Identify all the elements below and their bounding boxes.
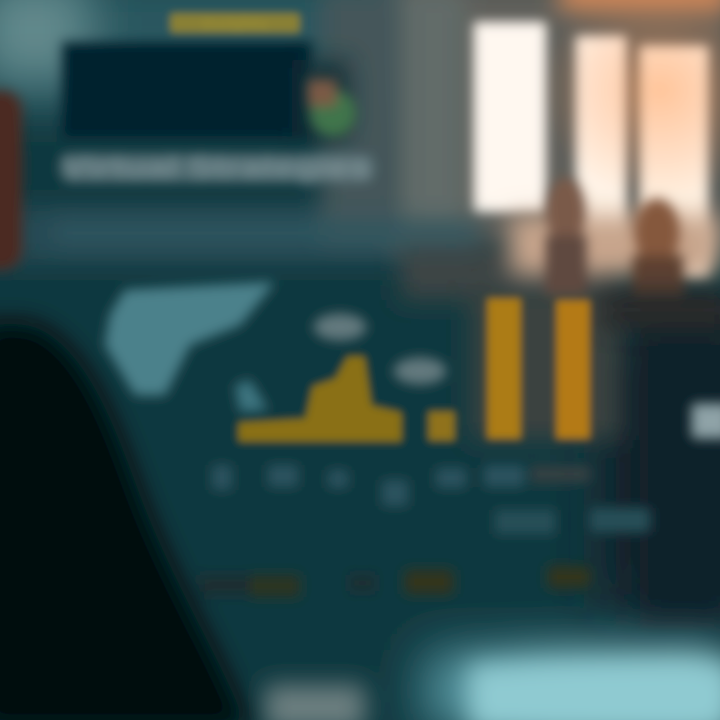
black foreground silhouette xyxy=(0,322,250,720)
secondary labels xyxy=(495,508,650,534)
area bars xyxy=(238,356,402,442)
subtitle band xyxy=(50,222,480,244)
chart value labels xyxy=(314,314,446,384)
amber bar chart xyxy=(238,298,590,442)
bright windows xyxy=(474,0,720,276)
heading: Virtual Strategies xyxy=(62,151,370,184)
bottom cyan glow xyxy=(265,650,720,720)
axis labels xyxy=(212,465,590,506)
reddish figure at left edge xyxy=(0,90,22,270)
tall bar two xyxy=(556,300,590,439)
world map xyxy=(105,282,275,412)
dark ledge below the windows xyxy=(600,290,720,330)
white desk highlight xyxy=(692,404,720,438)
amber title bar: Insights xyxy=(202,14,268,33)
dark header panel xyxy=(62,42,312,138)
silhouettes of people at the window xyxy=(545,178,684,300)
tall bar one xyxy=(487,298,521,439)
amber title bar xyxy=(170,13,300,33)
bottom legend xyxy=(200,566,590,597)
logo icon xyxy=(308,80,356,136)
short bar xyxy=(428,411,455,441)
